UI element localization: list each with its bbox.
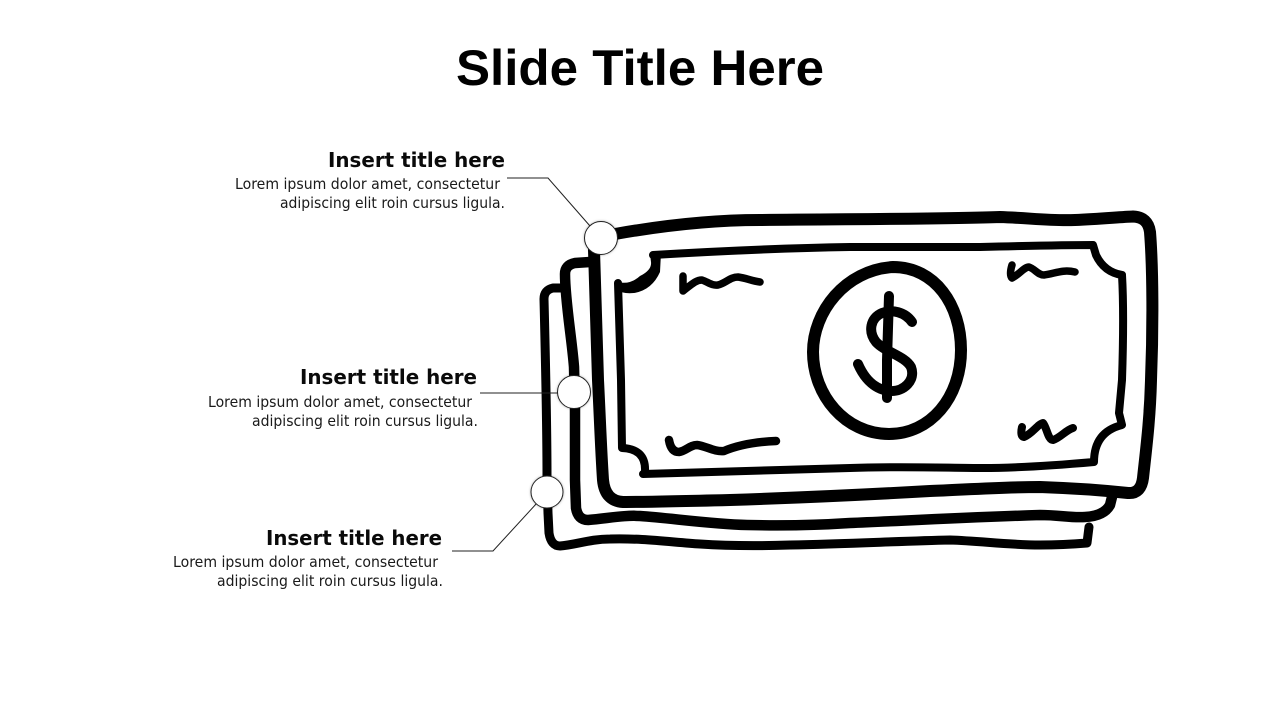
leader line 1: [507, 178, 590, 226]
body text 3: adipiscing elit roin cursus ligula.: [217, 572, 443, 590]
squiggle: top left: [683, 276, 760, 291]
body text 3: Lorem ipsum dolor amet, consectetur: [173, 553, 439, 571]
squiggle: top right: [1010, 265, 1075, 278]
body text 2: adipiscing elit roin cursus ligula.: [252, 412, 478, 430]
squiggle: bottom left: [669, 440, 776, 452]
middle bill outline: [565, 262, 1112, 525]
body text 2: Lorem ipsum dolor amet, consectetur: [208, 393, 473, 411]
heading 2: Insert title here: [300, 365, 477, 389]
heading 3: Insert title here: [266, 526, 442, 550]
heading 1: Insert title here: [328, 148, 505, 172]
callout 1: [235, 148, 618, 254]
marker 1: [584, 222, 618, 254]
body text 1: Lorem ipsum dolor amet, consectetur: [235, 175, 501, 193]
dollar sign: [858, 296, 912, 398]
illustration: stack of dollar bills: [544, 216, 1152, 546]
squiggle: bottom right: [1021, 423, 1073, 440]
marker 3: [531, 476, 563, 508]
body text 1: adipiscing elit roin cursus ligula.: [280, 194, 505, 212]
inner frame of front bill: [618, 245, 1123, 474]
callout 2: [208, 365, 590, 430]
back bill outline: [544, 288, 1089, 546]
callout 3: [173, 476, 563, 590]
currency medallion: [813, 267, 961, 434]
leader line 2: [480, 392, 558, 394]
marker 2: [558, 376, 590, 408]
leader line 3: [452, 503, 537, 551]
title: Slide Title Here: [456, 40, 824, 96]
front bill outline: [594, 216, 1152, 502]
corner scallop: top left: [618, 253, 661, 293]
